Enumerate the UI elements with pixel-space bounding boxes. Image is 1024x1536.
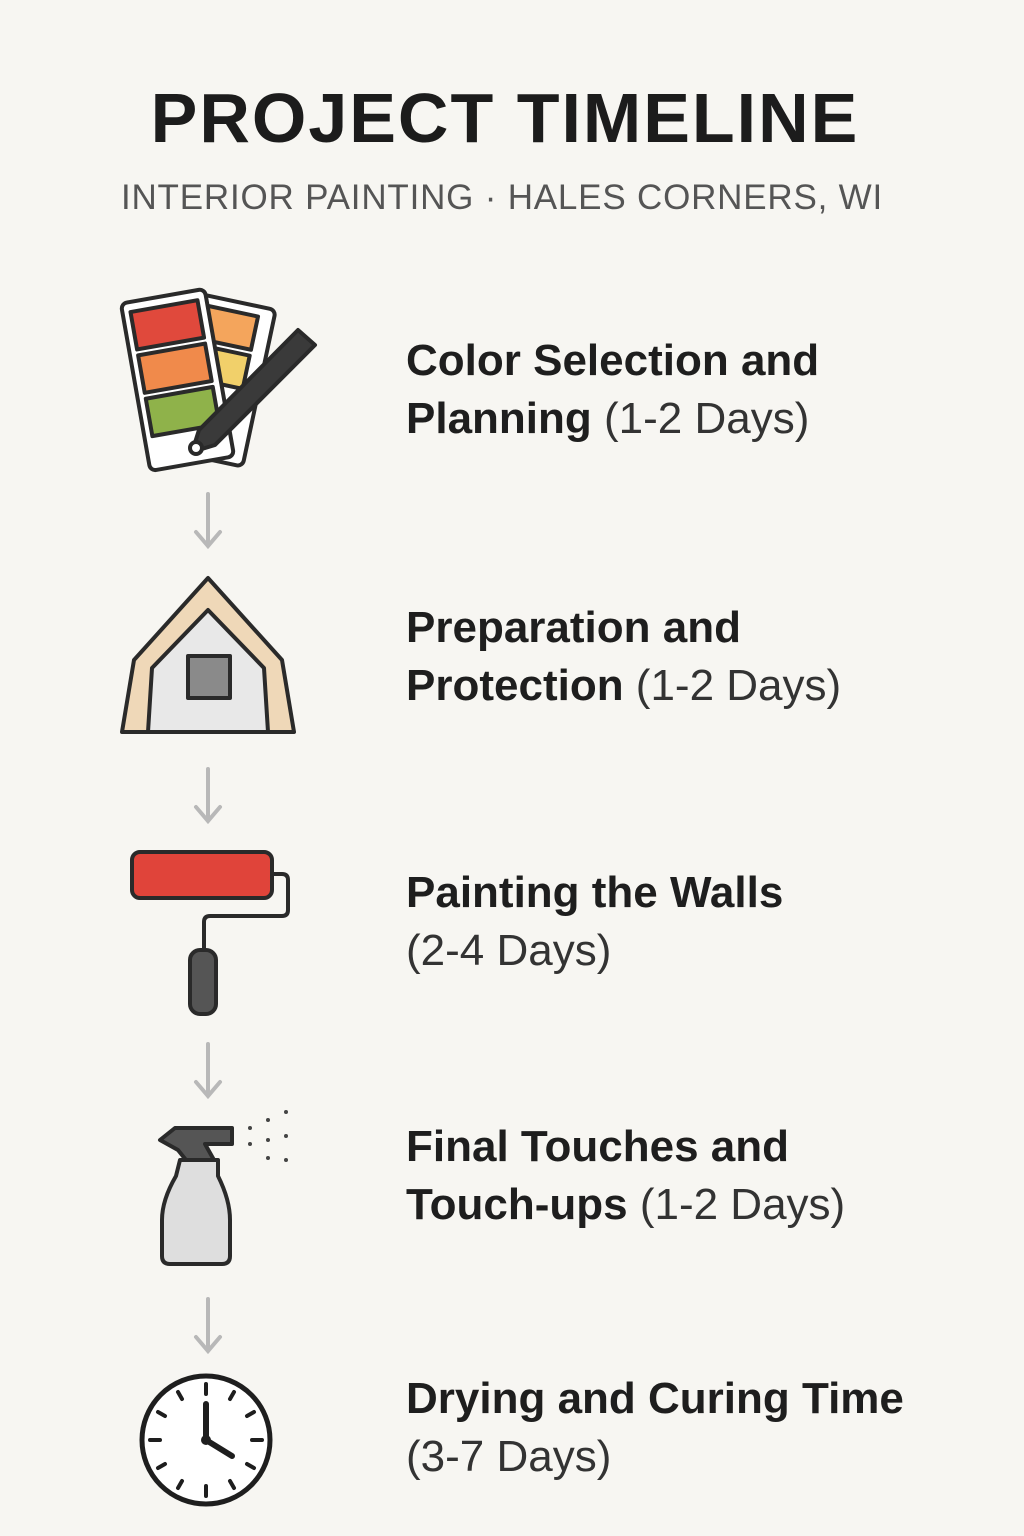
title: PROJECT TIMELINE (151, 79, 859, 157)
arrow 3 (194, 1042, 222, 1099)
step 1 text (406, 336, 819, 443)
step 1 text: Color Selection and (406, 336, 819, 385)
step 4 text: Touch-ups (1-2 Days) (406, 1180, 845, 1229)
arrow 1 (194, 492, 222, 549)
step 3 text: Painting the Walls (406, 868, 783, 917)
subtitle: INTERIOR PAINTING · HALES CORNERS, WI (121, 178, 883, 217)
step 3 text: (2-4 Days) (406, 926, 611, 975)
icon: spray bottle (158, 1110, 288, 1266)
step 2 text (406, 603, 841, 710)
icon: clock (140, 1374, 272, 1506)
step 2 text: Preparation and (406, 603, 741, 652)
step 3 text (406, 868, 783, 975)
arrow 2 (194, 767, 222, 824)
step 2 text: Protection (1-2 Days) (406, 661, 841, 710)
step 4 text (406, 1122, 845, 1229)
icon: house covered (120, 576, 296, 734)
step 5 text: Drying and Curing Time (406, 1374, 904, 1423)
icon: paint roller (130, 850, 290, 1016)
step 5 text: (3-7 Days) (406, 1432, 611, 1481)
step 4 text: Final Touches and (406, 1122, 789, 1171)
icon: color swatches and pencil (120, 288, 318, 472)
arrow 4 (194, 1297, 222, 1354)
step 1 text: Planning (1-2 Days) (406, 394, 809, 443)
step 5 text (406, 1374, 904, 1481)
